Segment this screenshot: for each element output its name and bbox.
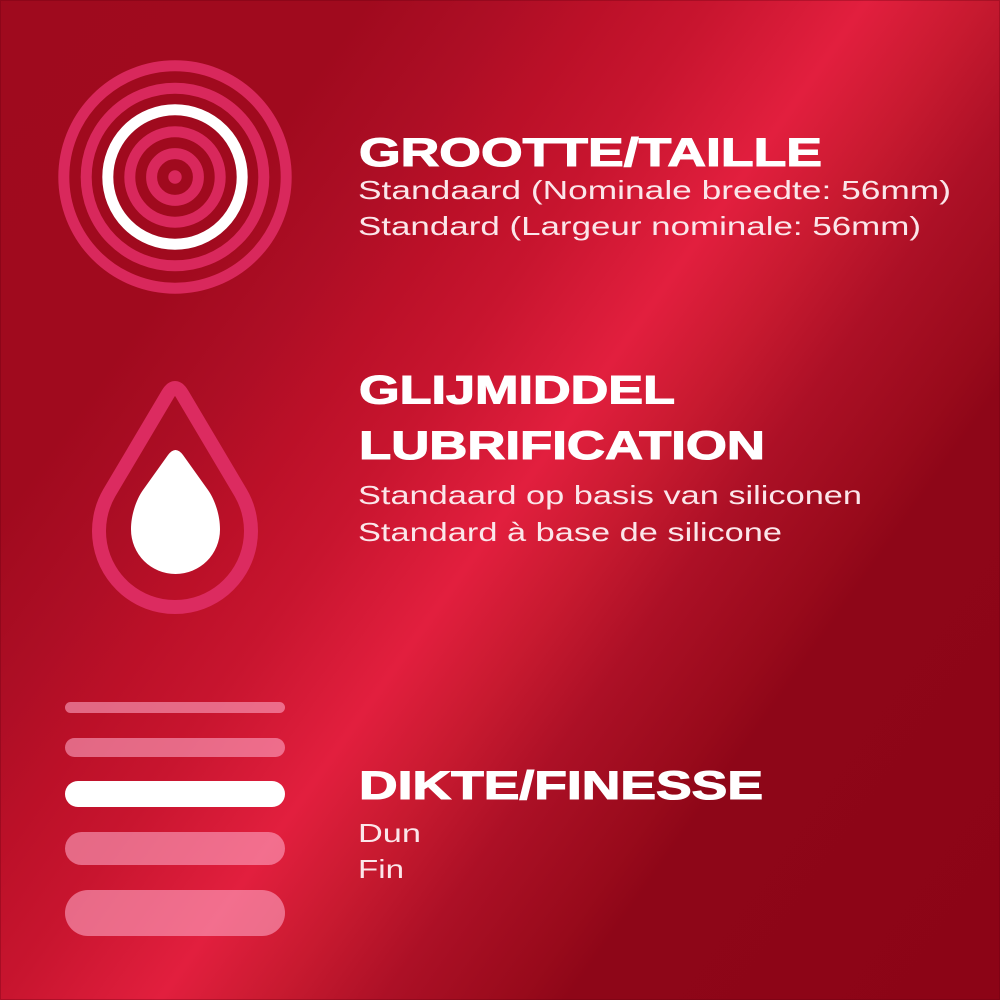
heading: dikte/finesse: DIKTE/FINESSE bbox=[359, 764, 763, 808]
text: French lubrication: Standard à base de silicone bbox=[358, 517, 782, 547]
text: Dutch thickness: Dun bbox=[358, 818, 421, 848]
icon: concentric size circles bbox=[64, 66, 286, 288]
text: French size: Standard (Largeur nominale: 56mm) bbox=[358, 211, 921, 241]
section: lubrication heading and text bbox=[358, 368, 862, 547]
text: Dutch lubrication: Standaard op basis van siliconen bbox=[358, 480, 862, 510]
heading: grootte/taille: GROOTTE/TAILLE bbox=[359, 131, 822, 175]
heading: lubrification: LUBRIFICATION bbox=[359, 424, 765, 468]
section: thickness heading and text bbox=[358, 764, 763, 884]
icon: lubrication drop bbox=[99, 388, 251, 607]
text: French thickness: Fin bbox=[358, 854, 404, 884]
icon: thickness bars bbox=[65, 702, 285, 936]
section: size heading and text bbox=[358, 131, 951, 241]
text: Dutch size: Standaard (Nominale breedte: 56mm) bbox=[358, 175, 951, 205]
heading: glijmiddel: GLIJMIDDEL bbox=[359, 368, 675, 412]
